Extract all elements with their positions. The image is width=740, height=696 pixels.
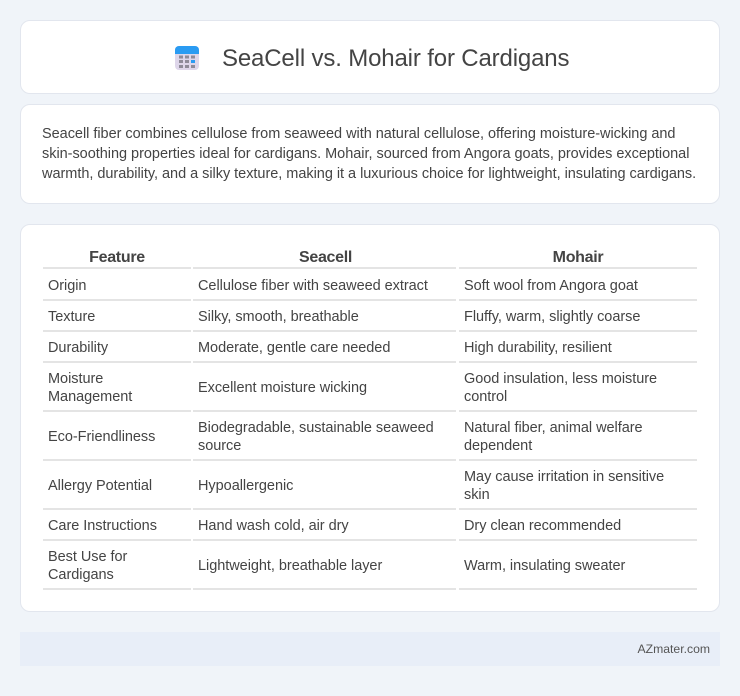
comparison table: Warm, insulating sweater — [464, 558, 625, 574]
row: texture: Texture — [48, 309, 95, 325]
comparison table: control — [464, 389, 507, 405]
footer credit: AZmater.com — [638, 642, 710, 656]
comparison table: Hand wash cold, air dry — [198, 518, 349, 534]
row: best use for cardigans — [48, 549, 128, 583]
comparison table: source — [198, 438, 241, 454]
row: origin: Origin — [48, 278, 86, 294]
comparison table: High durability, resilient — [464, 340, 612, 356]
row: moisture management: Management — [48, 389, 132, 405]
row: allergy potential: Allergy Potential — [48, 478, 152, 494]
comparison table: Soft wool from Angora goat — [464, 278, 638, 294]
comparison table: Cellulose fiber with seaweed extract — [198, 278, 428, 294]
comparison table: Good insulation, less moisture — [464, 371, 657, 387]
comparison table: Dry clean recommended — [464, 518, 621, 534]
comparison table: Moderate, gentle care needed — [198, 340, 390, 356]
row: care instructions: Care Instructions — [48, 518, 157, 534]
title card — [20, 20, 720, 94]
intro panel — [20, 104, 720, 204]
footer bar — [20, 632, 720, 666]
intro text: warmth, durability, and a silky texture, making it a luxurious choice for lightweight, insulating cardigans. — [42, 166, 696, 182]
comparison table: Excellent moisture wicking — [198, 380, 367, 396]
intro text: Seacell fiber combines cellulose from seaweed with natural cellulose, offering moisture-wicking and — [42, 126, 675, 142]
intro text: skin-soothing properties ideal for cardigans. Mohair, sourced from Angora goats, provides exceptional — [42, 146, 689, 162]
intro text — [42, 126, 696, 182]
row: moisture management — [48, 371, 132, 405]
comparison table: Biodegradable, sustainable seaweed — [198, 420, 434, 436]
comparison table: Lightweight, breathable layer — [198, 558, 382, 574]
comparison table: skin — [464, 487, 490, 503]
comparison table: Natural fiber, animal welfare — [464, 420, 643, 436]
title: SeaCell vs. Mohair for Cardigans — [222, 45, 569, 72]
icon: calendar — [175, 46, 199, 70]
comparison table: Silky, smooth, breathable — [198, 309, 359, 325]
row: best use for cardigans: Cardigans — [48, 567, 114, 583]
header: seacell: Seacell — [299, 249, 352, 266]
header: feature: Feature — [89, 249, 145, 266]
comparison table: dependent — [464, 438, 532, 454]
comparison table: Fluffy, warm, slightly coarse — [464, 309, 640, 325]
row: best use for cardigans: Best Use for — [48, 549, 127, 565]
row: eco-friendliness: Eco-Friendliness — [48, 429, 155, 445]
comparison table: May cause irritation in sensitive — [464, 469, 664, 485]
comparison table panel — [20, 224, 720, 612]
header: mohair: Mohair — [553, 249, 603, 266]
comparison table: Hypoallergenic — [198, 478, 293, 494]
row: moisture management: Moisture — [48, 371, 103, 387]
row: durability: Durability — [48, 340, 108, 356]
